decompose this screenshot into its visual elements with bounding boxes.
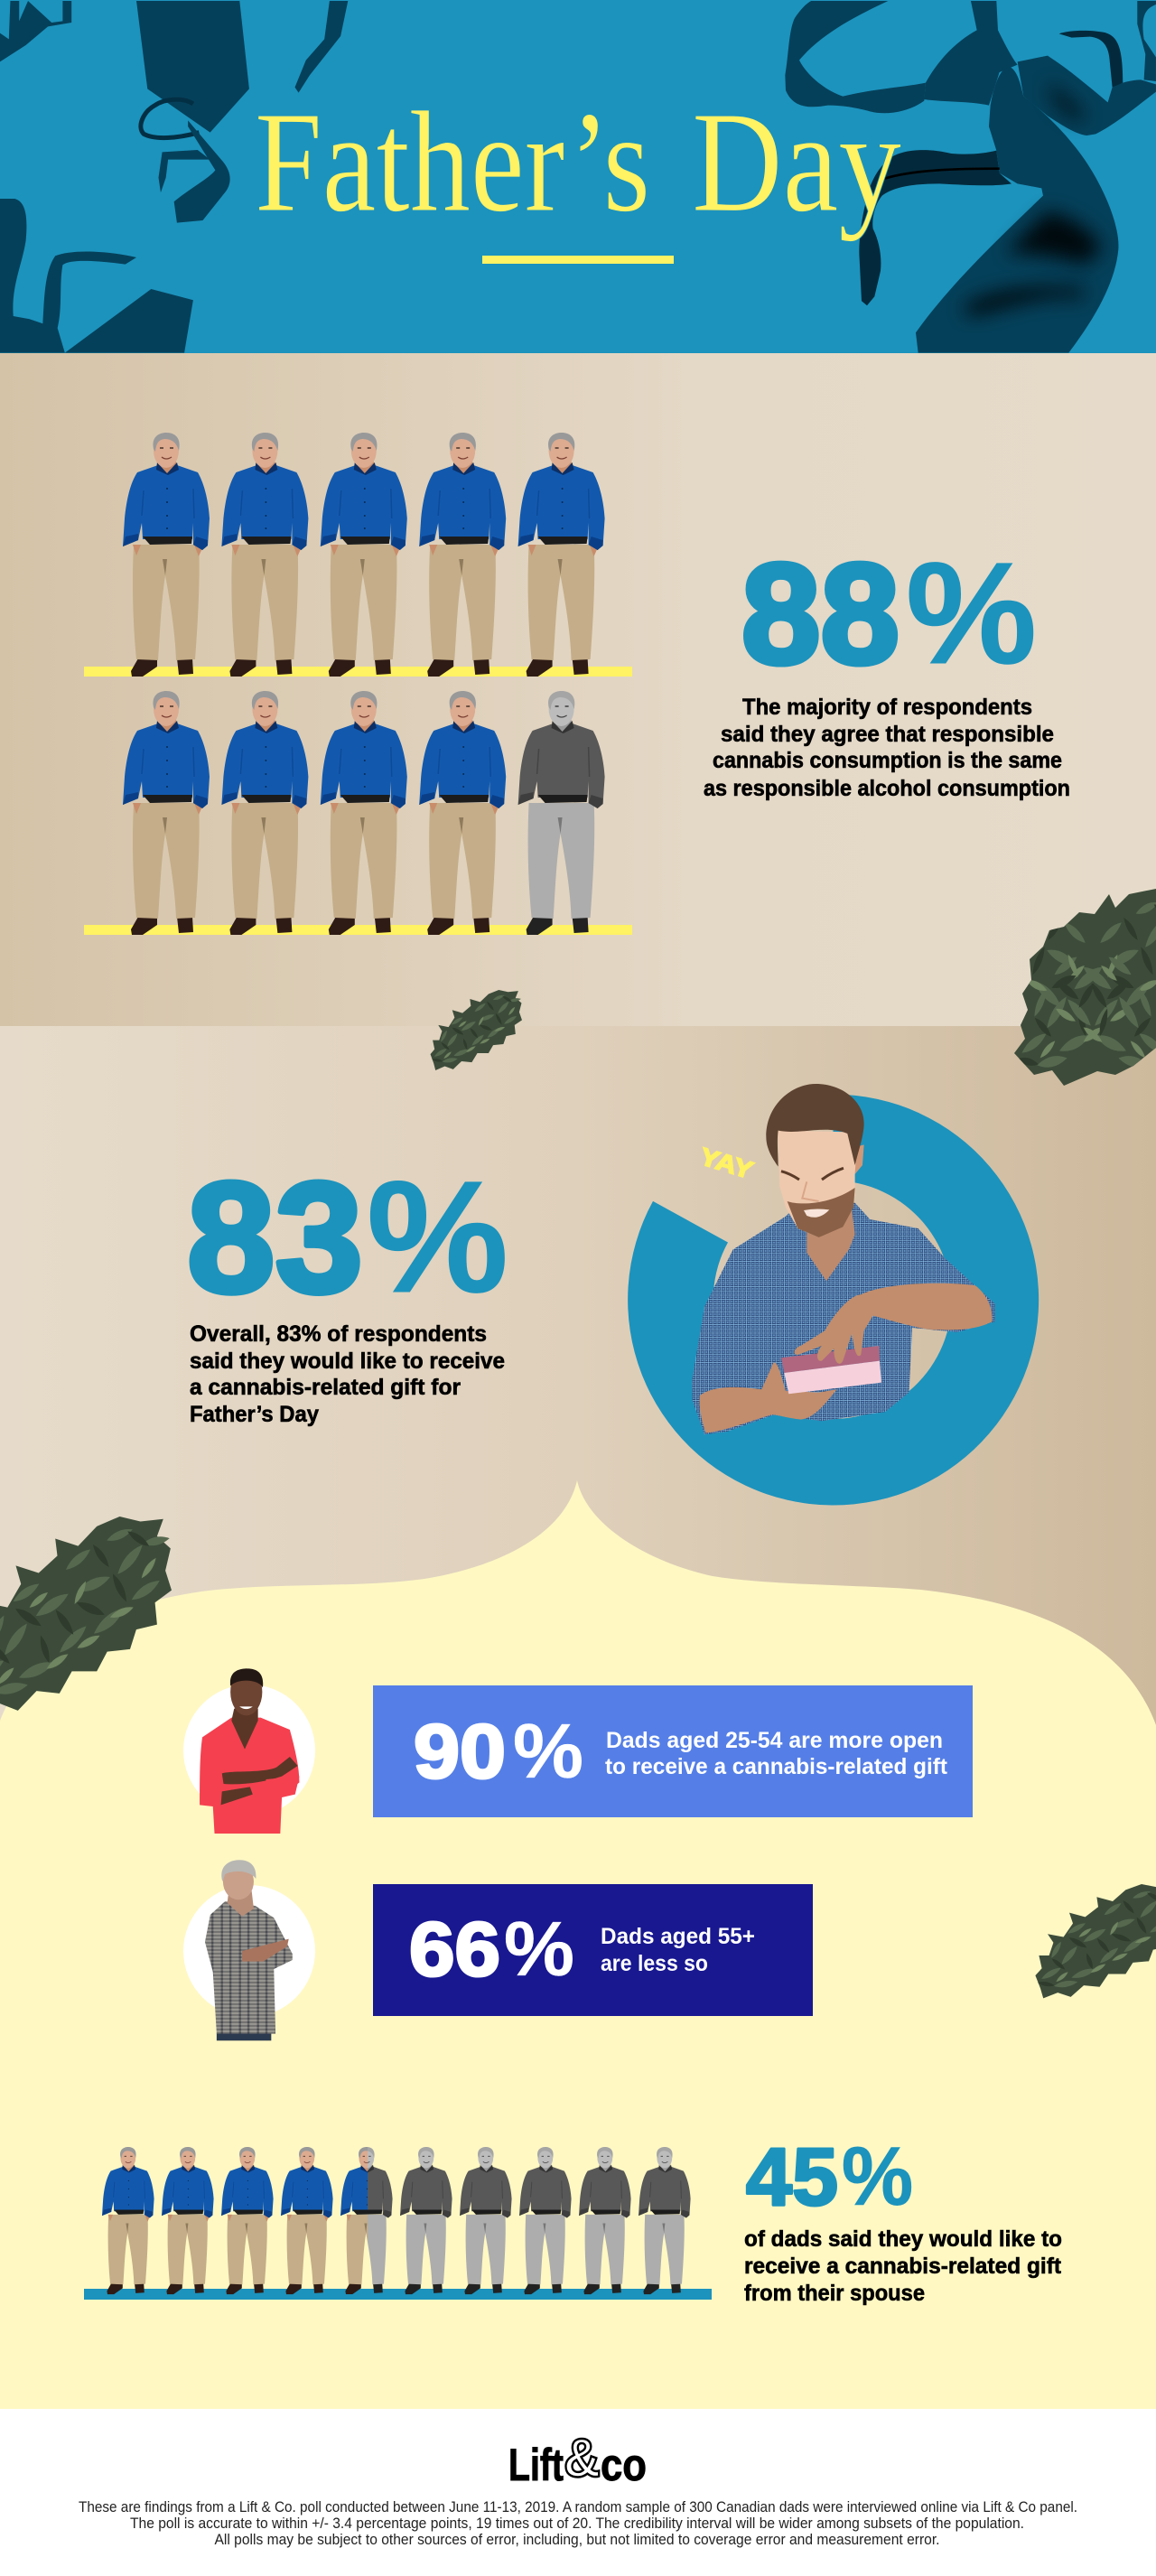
88% caption: The majority of respondents (742, 695, 1032, 720)
45% caption (744, 2226, 1062, 2306)
bud: centre (431, 990, 522, 1070)
number 45%: % (842, 2131, 913, 2223)
neckties decoration left (0, 1, 1156, 353)
methodology note: These are findings from a Lift & Co. poll conducted between June 11-13, 2019. A random sample of 300 Canadian dads were interviewed online via Lift & Co panel. (79, 2498, 1077, 2515)
methodology note: The poll is accurate to within +/- 3.4 percentage points, 19 times out of 20. The credibility interval will be wider among subsets of the population. (130, 2515, 1024, 2532)
bud: upper right (1014, 889, 1156, 1086)
box: 90% dads aged 25-54: % (513, 1709, 583, 1795)
88% caption: said they agree that responsible (721, 722, 1054, 747)
pictogram: 9 of 10 men, first row (84, 433, 632, 677)
box: 66% dads aged 55+: 66 (409, 1907, 500, 1992)
box: 90% dads aged 25-54: 90 (414, 1709, 506, 1794)
83% caption: said they would like to receive (190, 1349, 505, 1374)
number 88%: % (906, 532, 1037, 694)
number 83%: % (367, 1149, 508, 1326)
title: Day (692, 81, 901, 242)
box: 66% dads aged 55+ (373, 1884, 813, 2016)
number 83% (187, 1149, 508, 1326)
Lift & Co logo (508, 2428, 647, 2490)
box: 66% dads aged 55+: are less so (601, 1951, 708, 1976)
title underline (482, 256, 674, 264)
bud: left (0, 1517, 172, 1713)
YAY label: YAY (696, 1143, 756, 1184)
45% caption: receive a cannabis-related gift (744, 2254, 1062, 2279)
Lift & Co logo: Lift (508, 2440, 564, 2490)
pictogram: 9 of 10 men, second row (84, 691, 632, 935)
number 83%: 83 (187, 1149, 363, 1325)
88% caption: cannabis consumption is the same (713, 748, 1062, 773)
panel: 83% statistic (0, 1026, 1156, 1749)
title: Father’s (255, 81, 650, 242)
header banner (0, 0, 1156, 353)
88% caption (704, 695, 1070, 801)
83% caption: Father’s Day (190, 1402, 319, 1427)
45% caption: from their spouse (744, 2281, 925, 2306)
box: 66% dads aged 55+: Dads aged 55+ (601, 1924, 755, 1949)
83% caption (190, 1321, 505, 1427)
circle portrait: older dad (183, 1860, 315, 2040)
methodology note (79, 2498, 1077, 2548)
box: 90% dads aged 25-54 (373, 1685, 973, 1817)
Lift & Co logo: co (601, 2440, 647, 2490)
circle portrait: younger dad (183, 1668, 315, 1834)
number 45% (746, 2131, 913, 2223)
45% caption: of dads said they would like to (744, 2226, 1062, 2252)
pictogram: 45% of 10 men (84, 2147, 712, 2300)
methodology note: All polls may be subject to other sources of error, including, but not limited to coverage error and measurement error. (215, 2531, 939, 2548)
panel: yellow age and spouse section (0, 1480, 1156, 2409)
donut chart 83% (628, 1095, 1039, 1505)
box: 90% dads aged 25-54: Dads aged 25-54 are more open (606, 1728, 943, 1753)
Lift & Co logo: & (564, 2428, 601, 2488)
cannabis buds (0, 881, 1156, 1998)
neckties decoration right (785, 1, 1156, 353)
88% caption: as responsible alcohol consumption (704, 776, 1070, 801)
number 88%: 88 (741, 535, 900, 694)
footer (79, 2428, 1077, 2548)
83% caption: a cannabis-related gift for (190, 1375, 461, 1400)
man opening gift (692, 1084, 995, 1434)
number 88% (741, 532, 1037, 694)
number 45%: 45 (746, 2133, 838, 2223)
83% caption: Overall, 83% of respondents (190, 1321, 487, 1347)
panel: 88% statistic (0, 353, 1156, 1026)
box: 90% dads aged 25-54: to receive a cannabis-related gift (605, 1754, 948, 1779)
bud: right (1035, 1884, 1156, 1998)
box: 66% dads aged 55+: % (504, 1907, 574, 1993)
